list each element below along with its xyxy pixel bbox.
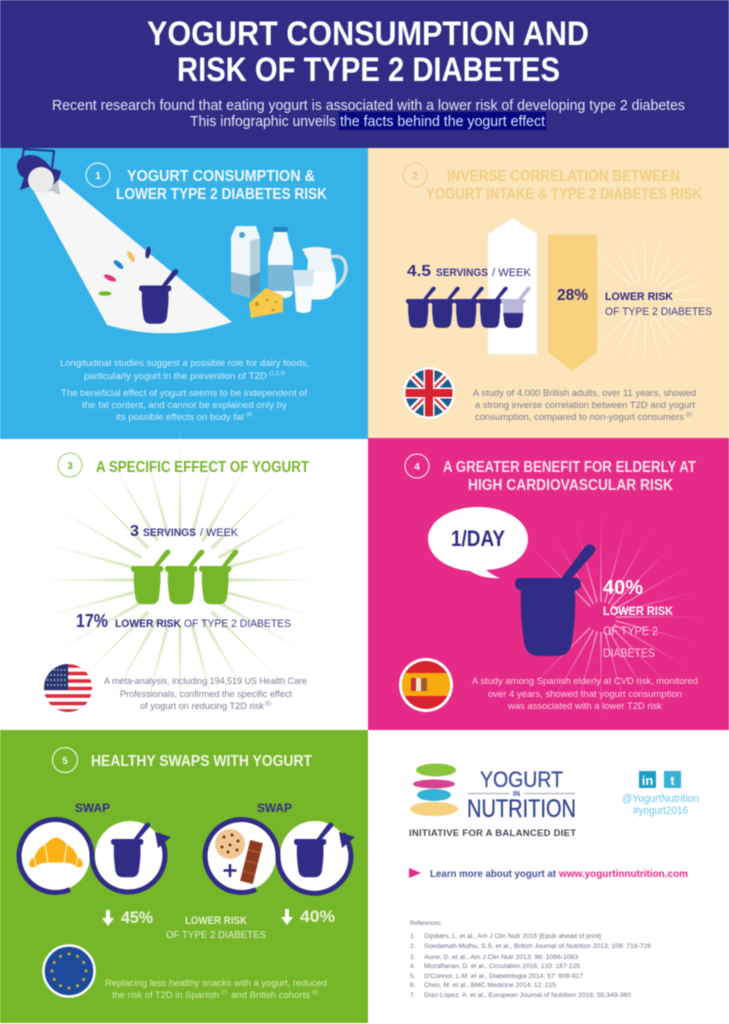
lower risk label <box>605 291 712 318</box>
icon: large yogurt cup <box>515 544 595 656</box>
speech bubble <box>428 507 528 578</box>
icon: US flag <box>44 664 92 712</box>
references: 3. <box>410 954 416 961</box>
section number 2: 2 <box>412 171 418 182</box>
references: References: <box>410 920 442 927</box>
text block 1: its possible effects on body fat <box>116 412 244 423</box>
subtitle: Recent research found that eating yogurt is associated with a lower risk of developing type 2 diabetes <box>52 98 685 114</box>
lower risk 40 percent <box>603 577 674 660</box>
heading 1: YOGURT CONSUMPTION & <box>127 168 315 185</box>
text block 1: (1,2,3) <box>269 371 285 377</box>
heading 1 <box>116 168 328 203</box>
text block 5: Replacing less healthy snacks with a yogurt, reduced <box>105 978 327 989</box>
references: Aune, D. et al., Am J Clin Nutr 2013; 98: 1066-1083 <box>424 954 578 961</box>
text block 2 <box>473 388 696 423</box>
label: swap: SWAP <box>257 803 292 815</box>
panel: inverse correlation <box>368 148 729 438</box>
icon: milk bottle <box>268 227 293 298</box>
text block 3: A meta-analysis, including 194,519 US Health Care <box>104 676 307 687</box>
icon: cheese <box>249 288 283 318</box>
heading 3: A SPECIFIC EFFECT OF YOGURT <box>96 459 309 476</box>
references: Gijsbers, L. et al., Am J Clin Nutr 2016 [Epub ahead of print] <box>424 933 601 940</box>
lower risk 17 percent: LOWER RISK <box>115 618 181 630</box>
stat: 40 percent: 40% <box>300 907 335 926</box>
sunburst rays <box>581 210 729 390</box>
arrow: swap loop <box>19 820 171 893</box>
logo: yogurt in nutrition <box>409 764 576 839</box>
call to action: Learn more about yogurt at <box>430 868 556 880</box>
lower risk 17 percent: 17% <box>76 611 108 631</box>
references: Soedamah-Muthu, S.S. et al., British Journal of Nutrition 2013; 109: 718-726 <box>424 943 651 950</box>
text block 2: a strong inverse correlation between T2D and yogurt <box>475 400 695 411</box>
text block 4 <box>472 676 698 712</box>
references: 1. <box>410 933 416 940</box>
stat: 45 percent: 45% <box>121 908 153 927</box>
social media links: @YogurtNutrition <box>622 793 699 805</box>
title: YOGURT CONSUMPTION AND <box>147 15 589 53</box>
text block 4: was associated with a lower T2D risk <box>507 701 662 712</box>
servings label: SERVINGS <box>436 267 488 279</box>
icon: milk carton <box>231 226 260 298</box>
references: Chen, M. et al., BMC Medicine 2014; 12: 215 <box>424 982 556 989</box>
lower risk label <box>166 915 266 941</box>
icon: cookie <box>215 829 245 859</box>
servings label: / WEEK <box>200 527 239 539</box>
section number 1 <box>86 163 110 187</box>
subtitle: the facts behind the yogurt effect <box>340 114 545 130</box>
panel: specific effect <box>43 432 310 713</box>
icon: five yogurt cups <box>406 287 531 328</box>
servings label: 4.5 <box>407 263 431 280</box>
section number 4: 4 <box>414 462 420 473</box>
icon: LinkedIn: in <box>642 773 653 788</box>
text block 5: the risk of T2D in Spanish <box>112 990 219 1001</box>
lower risk 17 percent: OF TYPE 2 DIABETES <box>184 618 291 630</box>
panel: healthy swaps <box>0 730 368 1023</box>
references: Díaz-López, A. et al., European Journal of Nutrition 2016; 55:349-360 <box>424 992 631 999</box>
text block 3 <box>104 676 307 712</box>
icon: colored drops <box>98 246 151 296</box>
references: 7. <box>410 992 416 999</box>
percentage 28: 28% <box>557 287 588 304</box>
text block 1: the fat content, and cannot be explained only by <box>82 400 287 411</box>
text block 5: and British cohorts <box>231 990 310 1001</box>
text block 1: (4) <box>246 412 252 418</box>
servings label <box>130 523 239 540</box>
social media links: #yogurt2016 <box>633 805 688 817</box>
text block 3: of yogurt on reducing T2D risk <box>140 701 264 712</box>
heading 2 <box>426 168 703 203</box>
text block 5: (7) <box>221 990 227 996</box>
icon: logo pebbles <box>410 764 458 816</box>
lower risk 17 percent <box>76 611 291 631</box>
social media links <box>622 771 699 817</box>
text block 2: (5) <box>686 412 692 418</box>
lower risk 40 percent: DIABETES <box>603 648 655 660</box>
references: 4. <box>410 963 416 970</box>
heading 4 <box>443 459 696 494</box>
call to action: www.yogurtinnutrition.com <box>558 868 688 880</box>
text block 1: Longitudinal studies suggest a possible role for dairy foods, <box>60 358 309 369</box>
lower risk label: LOWER RISK <box>605 291 673 303</box>
icon: Spain flag <box>399 658 453 712</box>
title: RISK OF TYPE 2 DIABETES <box>177 51 560 89</box>
icon: UK flag <box>403 367 455 419</box>
text block 3: Professionals, confirmed the specific effect <box>120 689 292 700</box>
section number 3: 3 <box>67 461 73 472</box>
heading 5: HEALTHY SWAPS WITH YOGURT <box>91 753 312 770</box>
stat: 40 percent <box>281 907 335 926</box>
icon: spotlight beam <box>33 175 232 333</box>
logo: yogurt in nutrition: YOGURT <box>480 767 563 792</box>
swap: croissant to yogurt <box>19 803 171 893</box>
logo: yogurt in nutrition: IN <box>513 791 520 798</box>
servings label: / WEEK <box>492 267 532 279</box>
subtitle: This infographic unveils <box>190 114 336 130</box>
text block 1: particularly yogurt in the prevention of T2D <box>84 371 267 382</box>
logo: yogurt in nutrition: NUTRITION <box>467 795 576 823</box>
lower risk 40 percent: LOWER RISK <box>603 606 674 618</box>
references <box>410 920 651 999</box>
text block 1 <box>60 358 309 423</box>
heading 1: LOWER TYPE 2 DIABETES RISK <box>116 186 328 203</box>
text block 5 <box>105 978 327 1001</box>
icon: milk jug <box>302 247 346 300</box>
section number 5 <box>52 748 78 772</box>
lower risk 40 percent: 40% <box>603 577 643 599</box>
section number 5: 5 <box>62 756 68 767</box>
icon: milk glass <box>293 270 314 313</box>
text block 2: consumption, compared to non-yogurt consumers <box>475 412 684 423</box>
references: Mozaffarian, D. et al., Circulation 2016; 133: 187-225 <box>424 963 580 970</box>
icon: croissant <box>29 837 83 868</box>
lower risk label: LOWER RISK <box>185 915 247 927</box>
stat: 45 percent <box>102 908 153 927</box>
lower risk label: OF TYPE 2 DIABETES <box>605 306 712 318</box>
servings label: 3 <box>130 523 139 540</box>
icon: yogurt cup in spotlight <box>139 269 178 324</box>
panel: yogurt consumption and lower risk <box>0 148 368 439</box>
lower risk label: OF TYPE 2 DIABETES <box>166 930 266 941</box>
subtitle <box>52 98 685 130</box>
title <box>147 15 589 89</box>
arrow: swap loop <box>205 820 355 893</box>
icon: three green yogurt cups <box>131 550 238 604</box>
swap: snacks to yogurt <box>205 803 355 893</box>
icon: plus <box>224 864 236 877</box>
servings label: SERVINGS <box>143 527 196 539</box>
text block 3: (6) <box>265 701 271 707</box>
references: 2. <box>410 943 416 950</box>
label: swap: SWAP <box>75 803 110 815</box>
section number 3 <box>58 453 82 477</box>
text block 1: The beneficial effect of yogurt seems to be independent of <box>61 388 307 399</box>
logo: yogurt in nutrition: INITIATIVE FOR A BALANCED DIET <box>409 828 576 839</box>
section number 1: 1 <box>95 171 101 182</box>
servings label <box>407 263 532 280</box>
icon: spotlight lamp <box>17 148 61 195</box>
icon: yogurt cup <box>111 823 150 877</box>
panel: greater benefit for elderly <box>368 438 729 732</box>
section number 4 <box>405 454 429 478</box>
references: O'Connor, L.M. et al., Diabetologia 2014; 57: 909-917 <box>424 973 583 980</box>
icon: yogurt cup <box>294 823 333 877</box>
icon: chocolate bar <box>240 840 263 884</box>
panel: header <box>0 0 729 148</box>
text block 5: (8) <box>312 990 318 996</box>
text block 4: over 4 years, showed that yogurt consumption <box>488 689 682 700</box>
references: 5. <box>410 973 416 980</box>
icon: Twitter: t <box>670 773 675 788</box>
references: 6. <box>410 982 416 989</box>
arrow: white up <box>488 218 537 354</box>
icon: EU flag <box>44 946 94 996</box>
section number 2 <box>403 163 427 187</box>
lower risk 40 percent: OF TYPE 2 <box>603 626 658 638</box>
sunburst rays <box>30 430 330 730</box>
arrow: gold down <box>548 235 597 371</box>
sunburst rays <box>519 502 716 732</box>
speech bubble: 1/DAY <box>451 526 505 551</box>
text block 4: A study among Spanish elderly at CVD risk, monitored <box>472 676 698 687</box>
call to action <box>409 868 688 880</box>
heading 4: HIGH CARDIOVASCULAR RISK <box>468 477 674 494</box>
text block 2: A study of 4.000 British adults, over 11 years, showed <box>473 388 696 399</box>
panel: logo and references <box>368 730 729 1024</box>
heading 2: INVERSE CORRELATION BETWEEN <box>447 168 680 185</box>
